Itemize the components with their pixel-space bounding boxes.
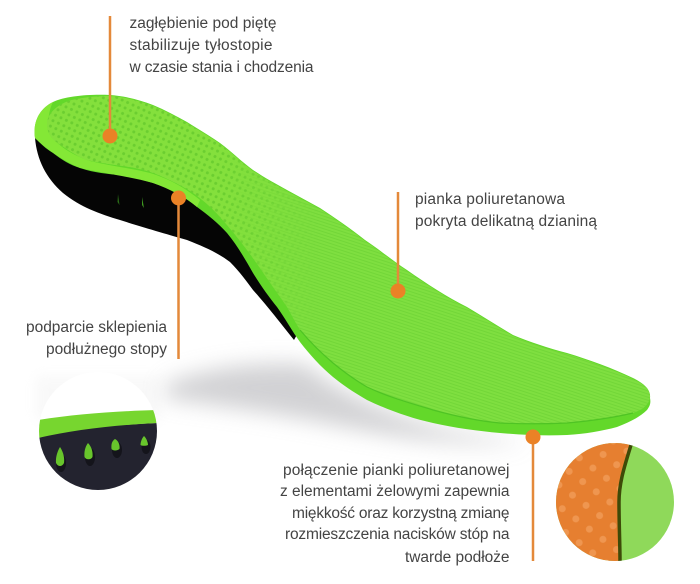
- insole: [35, 95, 650, 435]
- callout: gel elements: twarde podłoże: [405, 549, 510, 566]
- sole shadow: [165, 364, 530, 444]
- callout: polyurethane foam: pianka poliuretanowa: [415, 191, 565, 208]
- dark dividing layer: [619, 445, 631, 561]
- callout: arch support: podparcie sklepienia: [26, 319, 167, 336]
- callout: polyurethane foam: [390, 191, 597, 298]
- callout: gel elements: z elementami żelowymi zapewnia: [280, 483, 510, 500]
- orange gel surface: [556, 443, 630, 561]
- callout: heel recess: stabilizuje tyłostopie: [130, 37, 272, 54]
- callout: arch support: podłużnego stopy: [46, 341, 167, 358]
- callout: heel recess: zagłębienie pod piętę: [130, 15, 276, 32]
- callout: gel elements: miękkość oraz korzystną zmianę: [292, 505, 510, 522]
- callout: polyurethane foam: pokryta delikatną dzianiną: [415, 213, 597, 230]
- heel rim highlight: [35, 102, 200, 207]
- callout: heel recess: w czasie stania i chodzenia: [128, 59, 314, 76]
- callout: gel elements: rozmieszczenia nacisków stóp na: [285, 526, 510, 543]
- inset: arch side detail: [39, 410, 157, 490]
- inset green band: [38, 410, 158, 438]
- inset: material cross-section: [556, 443, 674, 561]
- inset gel dot shadows: [56, 440, 150, 472]
- inset background glow: [36, 376, 161, 420]
- ventilation slots: [118, 194, 144, 208]
- inset dark base: [38, 423, 158, 492]
- mesh top surface: [47, 96, 650, 424]
- black heel underside: [35, 138, 305, 340]
- callout: gel elements: połączenie pianki poliuretanowej: [283, 462, 510, 479]
- callout: arch support: [26, 190, 186, 359]
- forefoot edge line: [300, 330, 633, 424]
- knit heel texture: [47, 96, 281, 292]
- inset green gel dots: [56, 436, 148, 466]
- callout: heel recess: [102, 15, 314, 144]
- callout: gel elements: [280, 430, 540, 566]
- green rim: [35, 95, 650, 435]
